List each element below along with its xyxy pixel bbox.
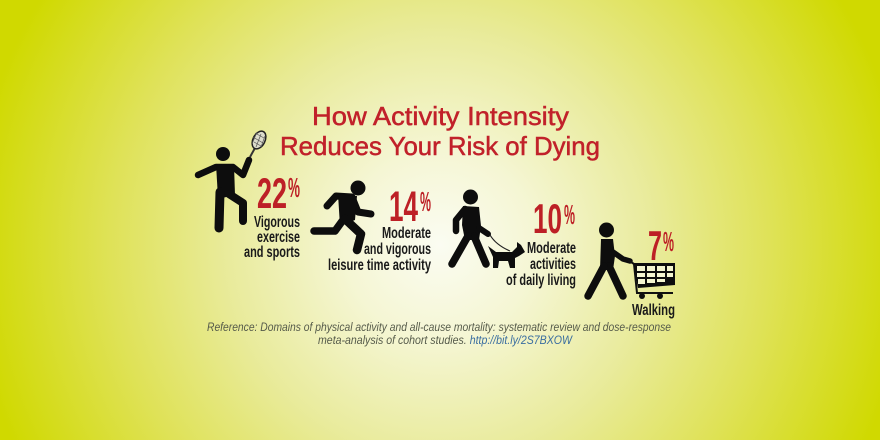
panel: moderate and vigorous leisure (314, 180, 431, 274)
label: moderate activities of daily living: activities (530, 256, 576, 273)
title: Reduces Your Risk of Dying (280, 131, 600, 161)
infographic canvas: % (663, 226, 674, 257)
stat: 14%: 14 (389, 183, 418, 231)
label: vigorous exercise and sports: Vigorous (254, 214, 300, 231)
label: moderate and vigorous leisure time activity: Moderate (382, 225, 431, 242)
panel: vigorous exercise (198, 129, 300, 261)
reference text: meta-analysis of cohort studies. http://bit.ly/2S7BXOW (318, 335, 573, 347)
icon: person walking dog (452, 190, 525, 268)
label: vigorous exercise and sports: and sports (244, 244, 300, 261)
stat: 7%: 7 (648, 222, 662, 269)
label: moderate activities of daily living: Moderate (527, 240, 576, 257)
panel: walking (588, 222, 675, 319)
stat: 10%: 10 (533, 195, 562, 242)
infographic canvas: % (564, 199, 575, 230)
infographic canvas: % (420, 186, 431, 217)
label: vigorous exercise and sports: exercise (257, 229, 300, 246)
label: walking: Walking (632, 302, 675, 319)
label: moderate activities of daily living: of daily living (506, 272, 576, 289)
icon: runner (314, 180, 371, 250)
icon: person with shopping cart (588, 222, 675, 299)
reference text (207, 322, 671, 347)
stat: 22%: 22 (257, 170, 287, 218)
title: How Activity Intensity (312, 101, 569, 131)
title (280, 101, 600, 161)
icon: tennis player (198, 129, 269, 228)
label: moderate and vigorous leisure time activity: and vigorous (364, 241, 431, 258)
reference text: Reference: Domains of physical activity and all-cause mortality: systematic review and dose-response (207, 322, 671, 334)
label: moderate activities of daily living (506, 240, 576, 289)
infographic canvas: % (288, 172, 300, 203)
label: moderate and vigorous leisure time activity: leisure time activity (328, 257, 431, 274)
panel: moderate activities of daily living (452, 190, 576, 289)
label: vigorous exercise and sports (244, 214, 300, 261)
label: moderate and vigorous leisure time activity (328, 225, 431, 274)
